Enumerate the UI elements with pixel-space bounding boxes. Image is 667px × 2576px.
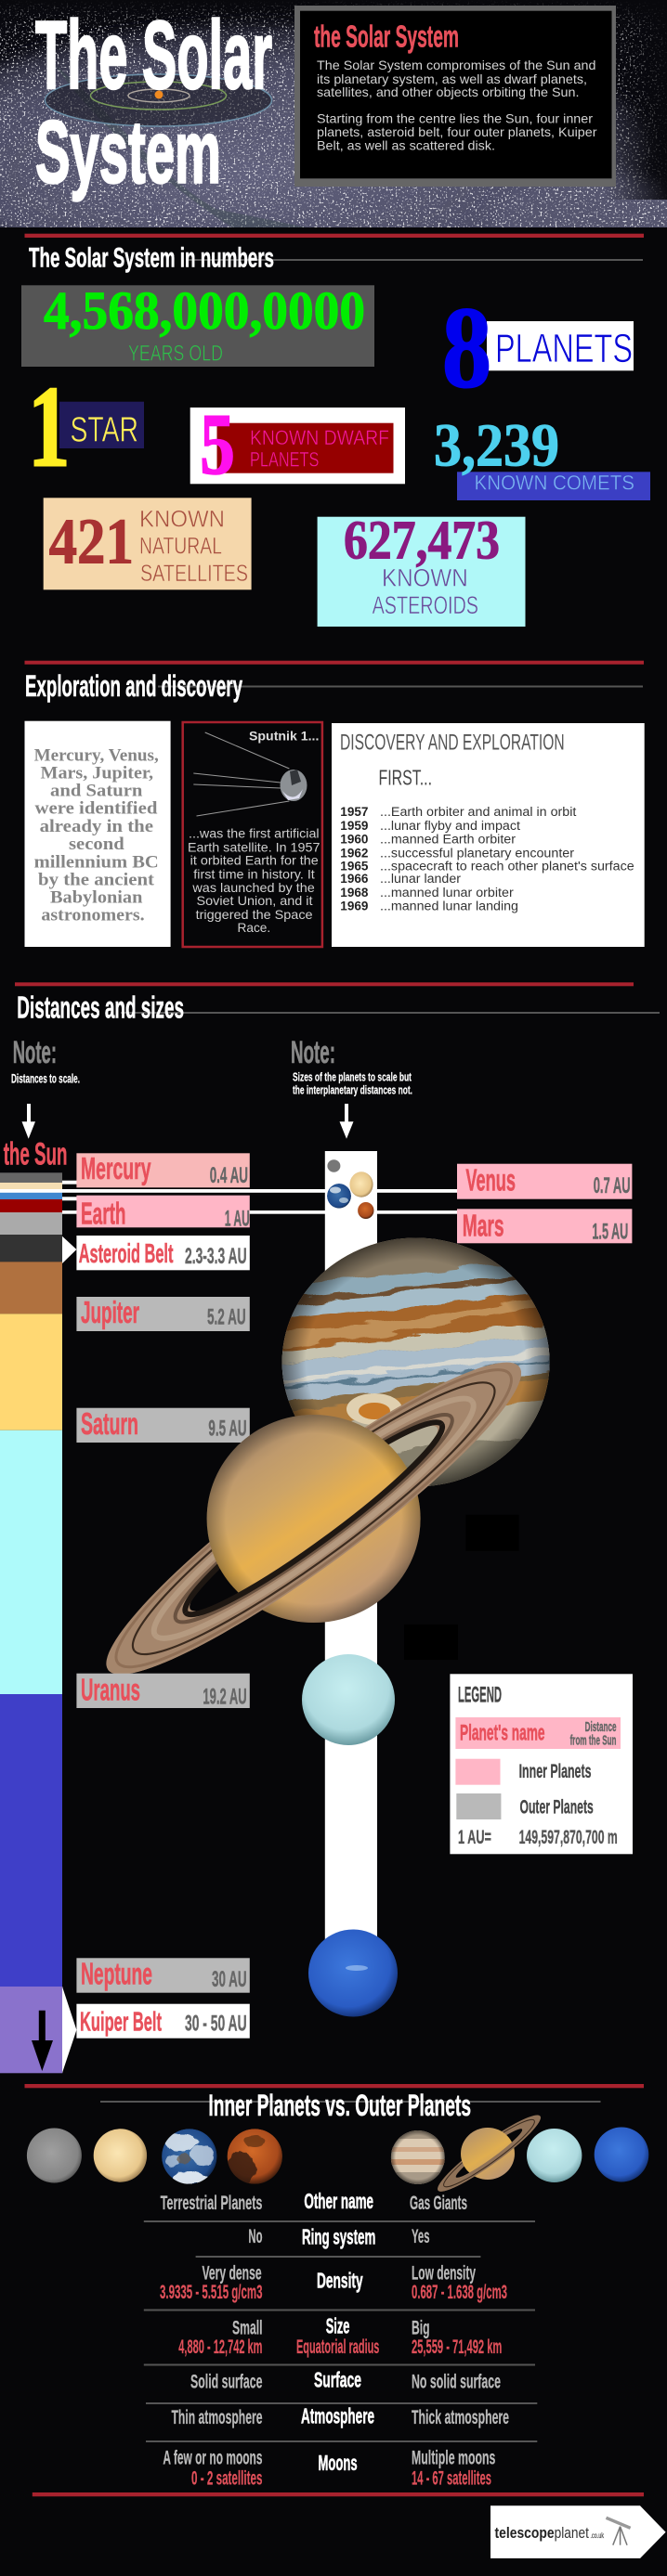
intro text: planets, asteroid belt, four outer planets, Kuiper [317, 124, 597, 139]
planet: Jupiter [390, 2130, 446, 2184]
panel: discovery timeline [332, 723, 645, 947]
panel: Sputnik [183, 722, 322, 947]
label: Uranus [76, 1673, 250, 1710]
note: distances to scale: Distances to scale. [11, 1072, 80, 1086]
row: atmosphere: Thick atmosphere [412, 2407, 509, 2428]
row: surface: No solid surface [412, 2372, 501, 2393]
row: density: 3.9335 - 5.515 g/cm3 [160, 2282, 262, 2303]
panel: discovery timeline: FIRST... [379, 765, 432, 789]
label: Neptune [76, 1957, 250, 1993]
panel: ancient astronomers: Mercury, Venus, [34, 745, 159, 765]
connector lines [0, 1181, 457, 1214]
note: sizes to scale: the interplanetary distances not. [293, 1082, 412, 1096]
note: distances to scale [11, 1035, 80, 1086]
stat: age: YEARS OLD [128, 341, 223, 366]
stat: dwarf planets: PLANETS [250, 447, 319, 471]
planet: Jupiter large [282, 1238, 550, 1486]
row: size: Big [412, 2317, 429, 2338]
legend outer planets: Outer Planets [520, 1796, 594, 1818]
stat: dwarf planets: KNOWN DWARF [250, 426, 389, 449]
stat: dwarf planets: 5 [200, 396, 235, 493]
panel: Sputnik: it orbited Earth for the [190, 853, 319, 868]
intro text: satellites, and other objects orbiting the Sun. [317, 84, 580, 99]
stat: planets: 8 [442, 285, 491, 413]
stat: comets: 3,239 [434, 412, 559, 480]
label: Earth [76, 1196, 250, 1232]
section heading: distances [15, 982, 660, 1025]
note: distances to scale: Note: [13, 1035, 57, 1070]
timeline events: ...spacecraft to reach other planet's surface [380, 859, 634, 873]
section heading: numbers: The Solar System in numbers [29, 242, 274, 273]
legend [450, 1674, 633, 1854]
the Sun label: the Sun [4, 1136, 67, 1171]
panel: ancient astronomers: Mars, Jupiter, [41, 763, 153, 783]
label: Mars [457, 1209, 632, 1244]
section heading: inner vs outer: Inner Planets vs. Outer Planets [208, 2089, 471, 2122]
timeline events: ...manned lunar landing [380, 899, 518, 913]
panel: Sputnik: Sputnik 1... [249, 728, 319, 743]
comparison table [144, 2189, 537, 2490]
label: Asteroid Belt: Asteroid Belt [79, 1239, 174, 1269]
intro heading: the Solar System [314, 19, 459, 54]
row: atmosphere: Thin atmosphere [171, 2407, 262, 2428]
logo: telescopeplanet [490, 2505, 666, 2558]
timeline events: ...Earth orbiter and animal in orbit [380, 805, 577, 819]
section heading: distances: Distances and sizes [17, 990, 184, 1025]
panel: Sputnik: ...was the first artificial [189, 826, 320, 841]
legend AU definition: 1 AU= [458, 1827, 491, 1848]
row: density: Density [317, 2268, 363, 2292]
arrow: Kuiper belt continues [32, 2011, 53, 2071]
timeline years: 1969 [340, 899, 368, 913]
panel: ancient astronomers: astronomers. [41, 906, 145, 926]
main title: System [35, 103, 221, 202]
Saturn back ring [81, 1329, 547, 1707]
timeline years [340, 805, 369, 913]
timeline years: 1960 [340, 832, 368, 846]
stat: star [28, 364, 144, 492]
stat: age: 4,568,000,0000 [44, 280, 365, 341]
planet: Saturn with rings [106, 1363, 521, 1674]
panel: ancient astronomers: were identified [35, 799, 158, 819]
icon: Sputnik satellite [193, 732, 307, 816]
stat: asteroids: ASTEROIDS [373, 591, 478, 619]
row: atmosphere [171, 2404, 509, 2428]
logo: telescopeplanet: telescope [494, 2524, 555, 2542]
row: size: 25,559 - 71,492 km [412, 2337, 502, 2358]
panel: Sputnik: Soviet Union, and it [197, 893, 313, 908]
planet: Neptune [595, 2128, 648, 2181]
label: Jupiter: Jupiter [81, 1295, 139, 1329]
Saturn front ring [108, 1366, 521, 1674]
planet: Venus small [349, 1171, 373, 1197]
legend outer planets [456, 1793, 594, 1819]
planet: Saturn [438, 2115, 541, 2192]
row: density: Low density [412, 2263, 476, 2285]
panel: Sputnik: was launched by the [191, 880, 315, 895]
row: ring system: No [248, 2226, 262, 2247]
planet: Mercury [27, 2128, 82, 2183]
label: Mercury: 0.4 AU [210, 1163, 248, 1188]
label: Mercury [76, 1151, 250, 1188]
timeline events: ...lunar flyby and impact [380, 819, 520, 833]
distance scale bar [0, 1172, 62, 2073]
planet: Mars [228, 2129, 282, 2187]
stat: planets [442, 285, 634, 413]
intro text: Belt, as well as scattered disk. [317, 137, 495, 152]
label: Neptune: 30 AU [212, 1967, 247, 1992]
timeline events: ...successful planetary encounter [380, 846, 575, 860]
row: surface [190, 2368, 501, 2393]
timeline events: ...manned Earth orbiter [380, 832, 517, 846]
row: surface: Surface [314, 2368, 361, 2392]
row: moons: A few or no moons [163, 2447, 262, 2468]
header banner [0, 0, 667, 227]
legend key: from the Sun [570, 1732, 617, 1748]
row: density: 0.687 - 1.638 g/cm3 [412, 2282, 507, 2303]
label: Venus: 0.7 AU [594, 1173, 631, 1198]
planet: Mercury small [327, 1159, 340, 1172]
note: sizes to scale [291, 1035, 412, 1096]
stat: dwarf planets [190, 396, 405, 493]
label: Mars: Mars [463, 1209, 504, 1243]
label: Kuiper Belt: Kuiper Belt [80, 2007, 162, 2037]
planet: Earth [162, 2129, 217, 2185]
note: sizes to scale: Note: [291, 1035, 335, 1070]
note: sizes to scale: Sizes of the planets to scale but [293, 1069, 412, 1083]
logo: telescopeplanet: .co.uk [591, 2531, 605, 2540]
planet: Earth small [327, 1184, 351, 1209]
white column: planet sizes [325, 1151, 377, 1940]
legend key: Planet's name [460, 1720, 544, 1745]
decorative black squares [404, 1515, 519, 1660]
row: size: Equatorial radius [296, 2337, 379, 2358]
arrow: down to planets [340, 1104, 353, 1139]
stat: satellites: SATELLITES [140, 561, 248, 587]
orbit diagram [45, 65, 307, 227]
label: Neptune: Neptune [81, 1957, 152, 1991]
stat: satellites [44, 498, 252, 589]
timeline events: ...manned lunar orbiter [380, 886, 514, 900]
stat: star: 1 [28, 364, 71, 492]
planet: Venus [94, 2129, 147, 2182]
planet row [26, 2115, 648, 2192]
intro panel [294, 6, 616, 187]
arrow: down to the Sun [22, 1104, 35, 1139]
timeline years: 1966 [340, 872, 369, 886]
row: size: 4,880 - 12,742 km [178, 2337, 262, 2358]
panel: Sputnik: Earth satellite. In 1957 [188, 839, 320, 854]
main title [35, 2, 272, 202]
panel: ancient astronomers: already in the [40, 817, 153, 836]
intro text: The Solar System compromises of the Sun and [317, 58, 596, 72]
label: Venus [457, 1163, 632, 1199]
section heading: numbers [24, 234, 644, 273]
intro text: Starting from the centre lies the Sun, four inner [317, 111, 593, 126]
panel: ancient astronomers: and Saturn [50, 781, 143, 800]
stat: satellites: NATURAL [139, 534, 222, 560]
panel: ancient astronomers: millennium BC [34, 852, 159, 872]
label: Saturn [76, 1406, 250, 1443]
label: Earth: Earth [81, 1196, 126, 1230]
row: other name: Gas Giants [410, 2193, 467, 2214]
row: density [160, 2263, 507, 2303]
timeline years: 1962 [340, 846, 368, 860]
label: Jupiter [76, 1295, 250, 1331]
label: Uranus: Uranus [81, 1673, 140, 1707]
planet: Uranus large [302, 1654, 395, 1745]
row: moons: 14 - 67 satellites [412, 2468, 491, 2490]
label: Kuiper Belt: 30 - 50 AU [185, 2011, 247, 2036]
row: atmosphere: Atmosphere [301, 2404, 374, 2428]
stat: satellites: KNOWN [139, 507, 225, 533]
label: Earth: 1 AU [225, 1207, 250, 1232]
section heading: inner vs outer [24, 2084, 644, 2122]
row: moons: 0 - 2 satellites [191, 2468, 262, 2490]
stat: star: STAR [71, 411, 138, 450]
panel: Sputnik: triggered the Space [196, 907, 313, 922]
timeline events: ...lunar lander [380, 872, 462, 886]
stat: asteroids [318, 510, 526, 627]
row: size [178, 2313, 502, 2358]
stat: asteroids: KNOWN [382, 564, 468, 592]
section heading: exploration [24, 661, 644, 703]
row: surface: Solid surface [190, 2372, 262, 2393]
label: Kuiper Belt [62, 1987, 250, 2073]
intro text: its planetary system, as well as dwarf planets, [317, 71, 587, 86]
row: other name [161, 2189, 467, 2214]
row: density: Very dense [203, 2263, 262, 2285]
row: other name: Terrestrial Planets [161, 2193, 262, 2214]
stat: age [21, 280, 374, 367]
row: size: Size [326, 2313, 349, 2337]
stat: satellites: 421 [49, 507, 134, 578]
label: Mars: 1.5 AU [592, 1219, 628, 1244]
row: moons: Multiple moons [412, 2447, 495, 2468]
stat: comets: KNOWN COMETS [474, 471, 634, 494]
logo: telescopeplanet: planet [555, 2524, 589, 2542]
label: Asteroid Belt: 2.3-3.3 AU [185, 1244, 247, 1269]
timeline years: 1965 [340, 859, 369, 873]
label: Mercury: Mercury [81, 1151, 151, 1185]
label: Saturn: 9.5 AU [208, 1417, 247, 1442]
Saturn ring shadow [187, 1425, 456, 1632]
timeline events [380, 805, 634, 913]
main title: The Solar [35, 2, 272, 110]
planet: Neptune large [308, 1929, 398, 2016]
label: Venus: Venus [465, 1163, 516, 1197]
panel: ancient astronomers: second [69, 835, 124, 854]
row: moons [163, 2447, 495, 2490]
panel: ancient astronomers: by the ancient [38, 870, 155, 889]
stat: asteroids: 627,473 [344, 510, 500, 571]
legend inner planets: Inner Planets [519, 1761, 591, 1782]
label: Uranus: 19.2 AU [203, 1685, 247, 1710]
row: ring system: Ring system [302, 2225, 375, 2249]
label: Jupiter: 5.2 AU [207, 1305, 246, 1330]
timeline years: 1957 [340, 805, 368, 819]
intro text [317, 58, 597, 152]
row: other name: Other name [304, 2189, 373, 2213]
stat: comets [434, 412, 650, 500]
panel: Sputnik: first time in history. It [193, 867, 315, 882]
planet: Mars small [358, 1202, 373, 1219]
row: size: Small [232, 2317, 262, 2338]
planet: Uranus [527, 2129, 582, 2182]
Saturn limb shading [207, 1415, 421, 1623]
section heading: exploration: Exploration and discovery [25, 669, 242, 703]
label: Saturn: Saturn [81, 1406, 138, 1441]
icon: telescope [606, 2518, 631, 2545]
bottom rule [33, 2492, 644, 2496]
row: ring system: Yes [412, 2226, 429, 2247]
timeline years: 1968 [340, 886, 369, 900]
panel: Sputnik: Race. [238, 920, 270, 935]
row: moons: Moons [318, 2451, 358, 2475]
panel: ancient astronomers [24, 721, 171, 947]
legend inner planets [455, 1759, 591, 1785]
timeline years: 1959 [340, 819, 368, 833]
panel: ancient astronomers: Babylonian [50, 888, 143, 908]
legend AU definition [458, 1827, 618, 1848]
legend key: Distance [585, 1719, 617, 1735]
legend: LEGEND [458, 1682, 502, 1707]
